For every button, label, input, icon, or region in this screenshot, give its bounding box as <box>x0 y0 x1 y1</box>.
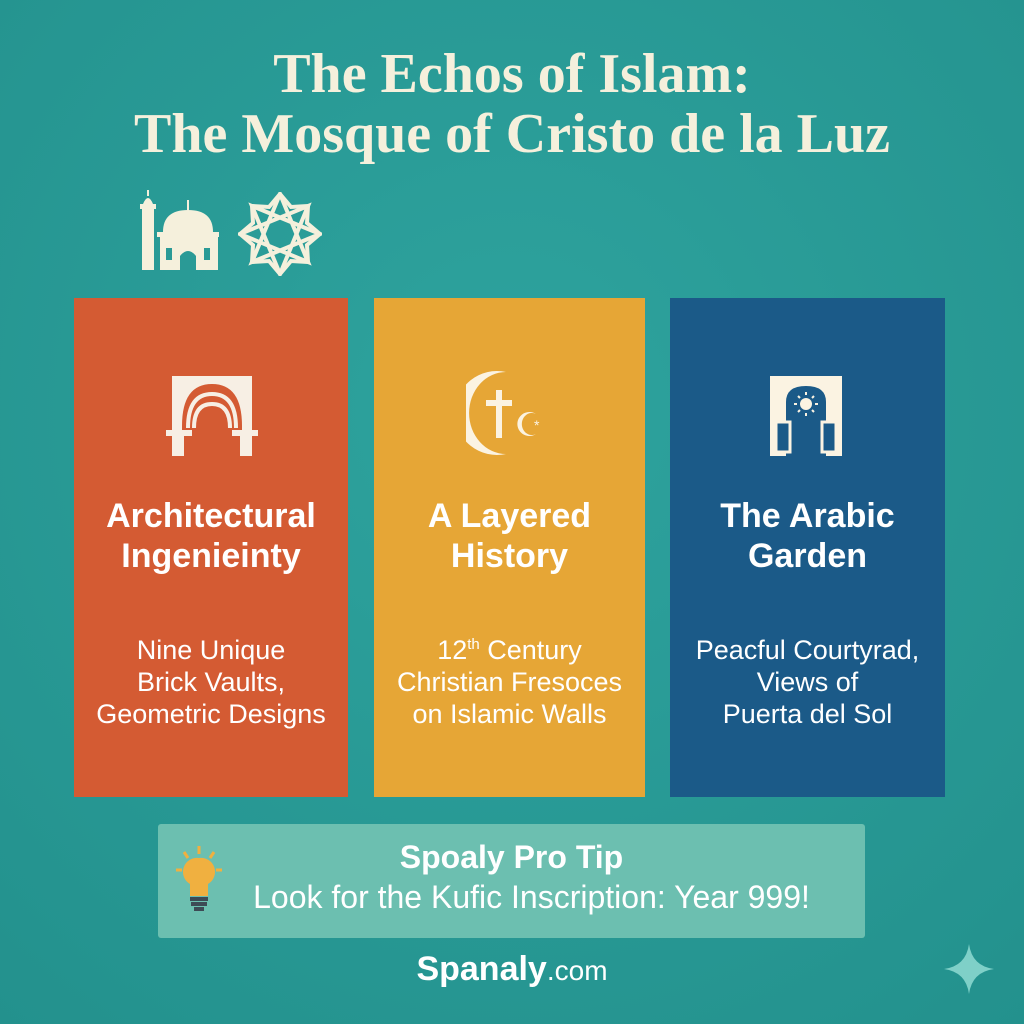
text: Geometric Designs <box>96 699 326 729</box>
icon: sparkle <box>944 944 994 994</box>
icon: light bulb <box>176 846 222 911</box>
icon: arch <box>166 376 258 456</box>
footer brand: Spanaly.com <box>416 950 608 988</box>
heading: Garden <box>748 537 867 575</box>
text: Nine Unique <box>137 635 285 665</box>
panel: history <box>374 298 645 797</box>
icon: star <box>238 192 322 276</box>
title: The Mosque of Cristo de la Luz <box>134 103 890 165</box>
title <box>134 43 890 165</box>
heading: Ingenieinty <box>121 537 301 575</box>
text: 12th Century <box>437 635 582 665</box>
text: Brick Vaults, <box>137 667 285 697</box>
panel: architectural <box>74 298 348 797</box>
callout: pro tip <box>158 824 865 938</box>
text: on Islamic Walls <box>412 699 607 729</box>
icon: crescent cross <box>466 371 540 455</box>
text <box>397 635 622 729</box>
icon: mosque <box>140 190 219 270</box>
text <box>696 635 919 729</box>
panel: garden <box>670 298 945 797</box>
heading: The Arabic <box>720 497 895 535</box>
tip heading: Spoaly Pro Tip <box>400 839 623 875</box>
text: Christian Fresoces <box>397 667 622 697</box>
text: Puerta del Sol <box>723 699 892 729</box>
heading: History <box>451 537 568 575</box>
title: The Echos of Islam: <box>273 43 751 105</box>
text: Peacful Courtyrad, <box>696 635 919 665</box>
tip text: Look for the Kufic Inscription: Year 999! <box>253 879 810 915</box>
heading <box>106 497 316 575</box>
heading <box>720 497 895 575</box>
heading: Architectural <box>106 497 316 535</box>
heading: A Layered <box>428 497 591 535</box>
heading <box>428 497 591 575</box>
text: Views of <box>757 667 858 697</box>
text <box>96 635 326 729</box>
icon: crescent cross: * <box>534 417 540 433</box>
icon: gate with sun <box>770 376 842 456</box>
